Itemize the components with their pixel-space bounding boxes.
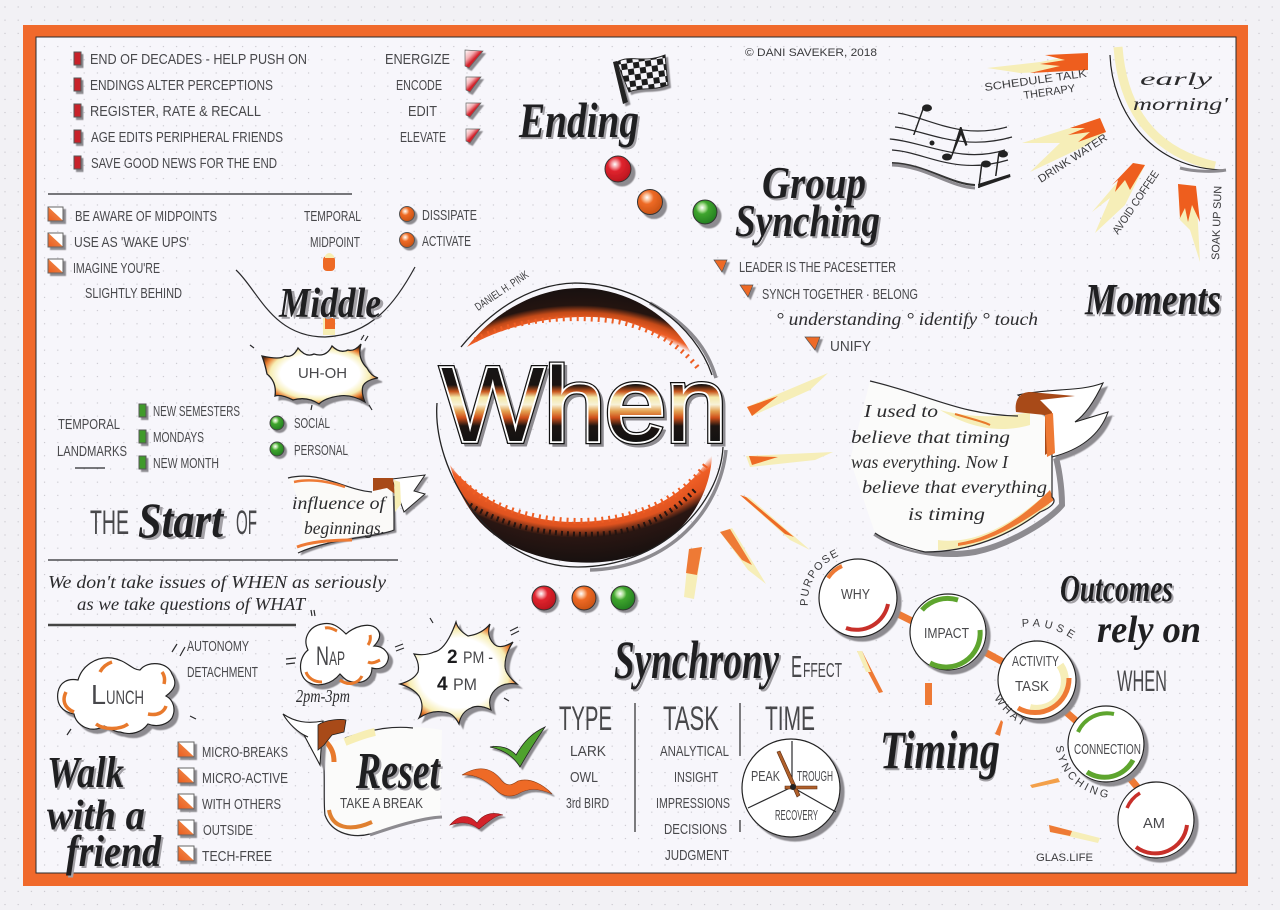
table: type task time: ANALYTICAL: [660, 743, 729, 760]
icon: music staff: [890, 104, 1012, 188]
heading: moments: Moments: [1084, 275, 1221, 324]
the start of heading: Start: [141, 494, 228, 550]
list: micro breaks: MICRO-ACTIVE: [202, 770, 288, 787]
temporal landmarks: TEMPORAL: [58, 416, 120, 433]
table: type task time: TYPE: [559, 700, 612, 738]
autonomy detachment: [187, 638, 296, 681]
burst: uh-oh: [250, 335, 378, 410]
table: type task time: OWL: [570, 769, 598, 786]
heading: moments: Moments: [1086, 277, 1223, 326]
sun rays: [987, 53, 1200, 262]
cloud: lunch: [58, 644, 196, 735]
table: type task time: TIME: [765, 700, 815, 738]
circle: why: [819, 559, 897, 637]
cloud: nap: 2pm-3pm: [296, 686, 350, 706]
list: ending tips: END OF DECADES - HELP PUSH ON: [90, 51, 307, 68]
list: midpoint advice: IMAGINE YOU'RE: [73, 260, 160, 277]
table: type task time: LARK: [570, 743, 606, 760]
heading: walk with a friend: with a: [49, 795, 147, 841]
list: energize encode edit elevate: EDIT: [408, 103, 437, 120]
banner: reset take a break: Reset: [357, 745, 443, 802]
temporal landmarks: LANDMARKS: [57, 443, 127, 460]
list: ending tips: ENDINGS ALTER PERCEPTIONS: [90, 77, 273, 94]
heading: timing: Timing: [882, 722, 1000, 782]
chain labels: WHAT: [995, 694, 1026, 724]
temporal landmarks: MONDAYS: [153, 429, 204, 446]
list: ending tips: SAVE GOOD NEWS FOR THE END: [91, 155, 277, 172]
icon: finish flag: [613, 55, 668, 104]
heading: group synching: Synching: [737, 197, 882, 248]
sun: early morning: [1110, 47, 1230, 171]
heading: timing: Timing: [880, 720, 1000, 780]
circle: impact: [910, 594, 986, 670]
burst: 2pm-4pm: 2: [447, 647, 458, 668]
small orange rays around timing: [857, 651, 1100, 843]
list: micro breaks: MICRO-BREAKS: [202, 744, 288, 761]
autonomy detachment: AUTONOMY: [187, 638, 249, 655]
heading: walk with a friend: friend: [68, 829, 164, 878]
central circle: when: When: [441, 346, 727, 464]
heading: ending: Ending: [518, 92, 639, 148]
sun ray labels: THERAPY: [1023, 83, 1077, 102]
sun ray labels: AVOID COFFEE: [1111, 169, 1162, 237]
circle: am: [1118, 782, 1194, 858]
cloud: nap: N: [316, 641, 329, 671]
table: type task time: INSIGHT: [674, 769, 718, 786]
burst: 2pm-4pm: [400, 618, 519, 724]
pie clock: PEAK: [751, 768, 780, 785]
sun ray labels: SCHEDULE TALK: [984, 68, 1088, 94]
list: energize encode edit elevate: ENERGIZE: [385, 51, 450, 68]
heading: group synching: Group: [762, 157, 866, 208]
pie clock: RECOVERY: [775, 807, 818, 824]
cloud: nap: AP: [329, 649, 345, 670]
burst: 2pm-4pm: 4: [437, 674, 448, 695]
burst: uh-oh: UH-OH: [298, 365, 347, 382]
temporal landmarks: PERSONAL: [294, 442, 348, 459]
temporal midpoint: MIDPOINT: [310, 234, 360, 251]
temporal midpoint: TEMPORAL: [304, 208, 361, 225]
the start of heading: [90, 492, 257, 550]
connector ropes: [894, 612, 1138, 788]
central circle: when: [437, 269, 730, 570]
the start of heading: THE: [90, 504, 129, 542]
circle: why: WHY: [841, 586, 870, 603]
temporal landmarks: SOCIAL: [294, 415, 330, 432]
list: energize encode edit elevate: [385, 50, 483, 146]
list: group synching: [714, 259, 1038, 355]
banner: quote: believe that everything: [862, 477, 1047, 497]
temporal landmarks: NEW MONTH: [153, 455, 219, 472]
banner: quote: was everything. Now I: [851, 452, 1009, 472]
heading: outcomes rely on when: WHEN: [1117, 665, 1167, 698]
circle: connection: CONNECTION: [1074, 741, 1141, 758]
dots path: ending to group: [605, 156, 717, 224]
temporal midpoint: DISSIPATE: [422, 207, 477, 224]
pie clock: [742, 739, 840, 837]
sun: early morning: morning': [1133, 94, 1230, 114]
temporal landmarks: NEW SEMESTERS: [153, 403, 240, 420]
circle: connection: [1068, 706, 1144, 782]
middle heading with curve: Middle: [281, 283, 384, 329]
circle: activity task: TASK: [1015, 678, 1049, 695]
autonomy detachment: DETACHMENT: [187, 664, 258, 681]
rays from when: [684, 373, 833, 599]
heading: ending: Ending: [520, 94, 641, 150]
table: type task time: [559, 700, 815, 864]
banner: influence of beginnings: [288, 475, 425, 553]
heading: outcomes rely on when: [1060, 568, 1201, 698]
statement: when vs what: We don't take issues of WHEN as seriously: [48, 572, 386, 592]
list: group synching: ° understanding ° identify ° touch: [776, 309, 1038, 329]
banner: quote: [850, 381, 1108, 554]
banner: reset take a break: [283, 714, 443, 836]
heading: synchrony effect: E: [791, 649, 802, 684]
cloud: lunch: UNCH: [106, 688, 144, 709]
chain labels: GLAS.LIFE: [1036, 852, 1093, 864]
banner: quote: believe that timing: [851, 427, 1010, 447]
central circle: when: When: [441, 346, 727, 464]
divider: [48, 193, 352, 195]
cloud: nap: [296, 610, 404, 706]
circle: impact: IMPACT: [924, 625, 969, 642]
circle: activity task: ACTIVITY: [1012, 653, 1059, 670]
heading: synchrony effect: Synchrony: [614, 630, 780, 690]
chain labels: SYNCHING: [1056, 746, 1108, 798]
banner: reset take a break: TAKE A BREAK: [340, 795, 423, 812]
timing chain: circles: [819, 559, 1194, 858]
circle: am: AM: [1143, 815, 1165, 832]
list: ending tips: REGISTER, RATE & RECALL: [90, 103, 261, 120]
banner: reset take a break: Reset: [355, 743, 441, 800]
statement: when vs what: [48, 572, 386, 614]
chain labels: [800, 549, 1108, 864]
burst: 2pm-4pm: PM: [453, 675, 477, 694]
list: ending tips: [74, 51, 307, 172]
temporal midpoint: [304, 206, 477, 251]
divider: [48, 559, 398, 561]
three balls: [532, 586, 635, 610]
table: type task time: 3rd BIRD: [566, 795, 609, 812]
divider: [48, 624, 296, 626]
list: group synching: SYNCH TOGETHER · BELONG: [762, 286, 918, 303]
heading: walk with a friend: [47, 748, 164, 878]
sun ray labels: DRINK WATER: [1036, 132, 1110, 186]
heading: group synching: [735, 157, 882, 248]
heading: group synching: Synching: [735, 195, 880, 246]
central circle: when: When: [441, 346, 727, 464]
central circle: when: DANIEL H. PINK: [473, 269, 531, 313]
table: type task time: IMPRESSIONS: [656, 795, 730, 812]
list: micro breaks: WITH OTHERS: [202, 796, 281, 813]
central circle: when: When: [444, 349, 730, 467]
text: OF: [236, 504, 257, 542]
heading: outcomes rely on when: rely on: [1097, 609, 1201, 651]
banner: quote: I used to: [863, 401, 938, 421]
list: midpoint advice: BE AWARE OF MIDPOINTS: [75, 208, 217, 225]
list: midpoint advice: USE AS 'WAKE UPS': [74, 234, 189, 251]
heading: synchrony effect: FFECT: [803, 660, 842, 682]
pie clock: TROUGH: [797, 768, 833, 785]
heading: walk with a friend: Walk: [47, 748, 124, 797]
middle heading with curve: Middle: [278, 281, 381, 327]
sun ray labels: SOAK UP SUN: [1210, 186, 1225, 260]
chain labels: PURPOSE: [800, 549, 838, 606]
list: midpoint advice: SLIGHTLY BEHIND: [85, 285, 182, 302]
list: micro breaks: [178, 742, 288, 865]
list: ending tips: AGE EDITS PERIPHERAL FRIENDS: [91, 129, 283, 146]
heading: walk with a friend: with a: [47, 793, 145, 839]
sun ray labels: [984, 68, 1225, 260]
heading: outcomes rely on when: Outcomes: [1060, 568, 1173, 610]
list: group synching: UNIFY: [830, 338, 871, 355]
list: energize encode edit elevate: ELEVATE: [400, 129, 446, 146]
the start of heading: Start: [138, 492, 225, 548]
heading: walk with a friend: Walk: [49, 750, 126, 799]
temporal midpoint: ACTIVATE: [422, 233, 471, 250]
chain labels: PAUSE: [1022, 618, 1076, 638]
banner: influence of beginnings: influence of: [292, 493, 388, 513]
heading: synchrony effect: Synchrony: [616, 632, 782, 692]
list: micro breaks: OUTSIDE: [203, 822, 253, 839]
temporal landmarks: [57, 403, 348, 472]
statement: when vs what: as we take questions of WHAT: [77, 594, 307, 614]
copyright: © DANI SAVEKER, 2018: [745, 47, 877, 59]
table: type task time: TASK: [663, 700, 719, 738]
banner: quote: is timing: [908, 504, 985, 524]
list: energize encode edit elevate: ENCODE: [396, 77, 442, 94]
heading: group synching: Group: [764, 159, 868, 210]
heading: outcomes rely on when: Outcomes: [1062, 570, 1175, 612]
middle heading with curve: [236, 253, 415, 337]
circle: activity task: [998, 641, 1076, 719]
list: group synching: LEADER IS THE PACESETTER: [739, 259, 896, 276]
list: midpoint advice: [48, 207, 217, 302]
heading: walk with a friend: friend: [66, 827, 162, 876]
table: type task time: DECISIONS: [664, 821, 727, 838]
burst: 2pm-4pm: PM -: [463, 648, 493, 667]
list: micro breaks: TECH-FREE: [202, 848, 272, 865]
sun: early morning: early: [1140, 69, 1212, 89]
table: type task time: JUDGMENT: [665, 847, 729, 864]
icon: birds: [450, 727, 552, 829]
cloud: lunch: L: [91, 679, 106, 710]
banner: influence of beginnings: beginnings.: [304, 518, 385, 538]
